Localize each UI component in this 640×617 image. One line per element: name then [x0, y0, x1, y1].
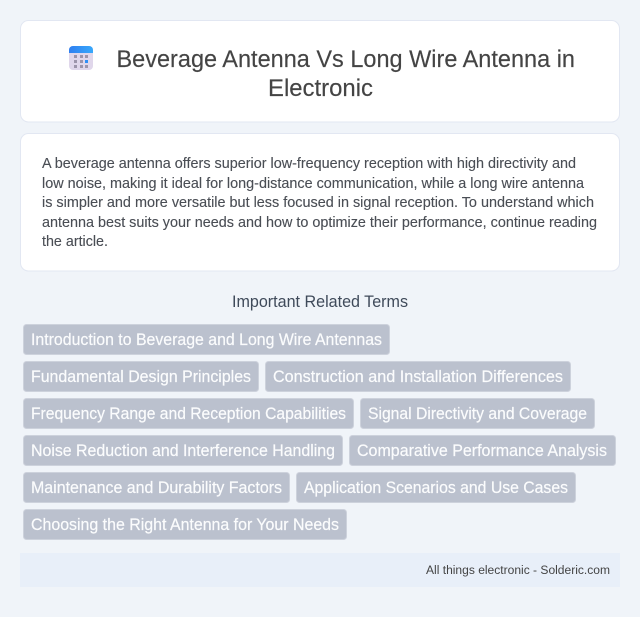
text block: summary: is simpler and more versatile but less focused in signal reception. To understand which: [42, 195, 594, 211]
tag: noise reduction: Noise Reduction and Interference Handling: [31, 442, 335, 460]
title: [116, 46, 575, 102]
tag: comparative performance: Comparative Performance Analysis: [357, 442, 607, 460]
tag: choosing antenna: Choosing the Right Antenna for Your Needs: [31, 516, 339, 534]
tag: introduction: Introduction to Beverage and Long Wire Antennas: [31, 331, 382, 349]
tag: signal directivity: [360, 398, 594, 428]
title: Electronic: [268, 75, 373, 102]
icon: calendar: [69, 46, 93, 70]
panel: summary paragraph: [20, 134, 620, 271]
tag: introduction: [24, 324, 390, 354]
text block: summary: the article.: [42, 234, 108, 250]
tag: fundamental design: [24, 362, 258, 392]
tag: construction: [266, 362, 570, 392]
footer: [20, 553, 620, 587]
tag list: [24, 324, 616, 540]
tag: comparative performance: [350, 436, 616, 466]
title: Beverage Antenna Vs Long Wire Antenna in: [116, 46, 575, 73]
tag: fundamental design: Fundamental Design Principles: [31, 368, 251, 386]
text block: summary: [42, 156, 597, 250]
tag: frequency range: [24, 398, 354, 428]
tag: maintenance: Maintenance and Durability Factors: [31, 479, 282, 497]
tag: application scenarios: [296, 472, 576, 502]
tag: signal directivity: Signal Directivity and Coverage: [368, 405, 587, 423]
text block: summary: A beverage antenna offers superior low-frequency reception with high directivity and: [42, 156, 576, 172]
tag: noise reduction: [24, 436, 342, 466]
heading: important related terms: Important Related Terms: [232, 293, 408, 311]
panel: title card: [20, 20, 620, 122]
text block: summary: antenna best suits your needs and how to optimize their performance, continue reading: [42, 215, 597, 231]
tag: frequency range: Frequency Range and Reception Capabilities: [31, 405, 346, 423]
footer: All things electronic - Solderic.com: [426, 563, 610, 577]
tag: maintenance: [24, 472, 290, 502]
text block: summary: low noise, making it ideal for long-distance communication, while a long wire antenna: [42, 176, 584, 192]
tag: choosing antenna: [24, 510, 346, 540]
tag: construction: Construction and Installation Differences: [273, 368, 563, 386]
tag: application scenarios: Application Scenarios and Use Cases: [304, 479, 568, 497]
